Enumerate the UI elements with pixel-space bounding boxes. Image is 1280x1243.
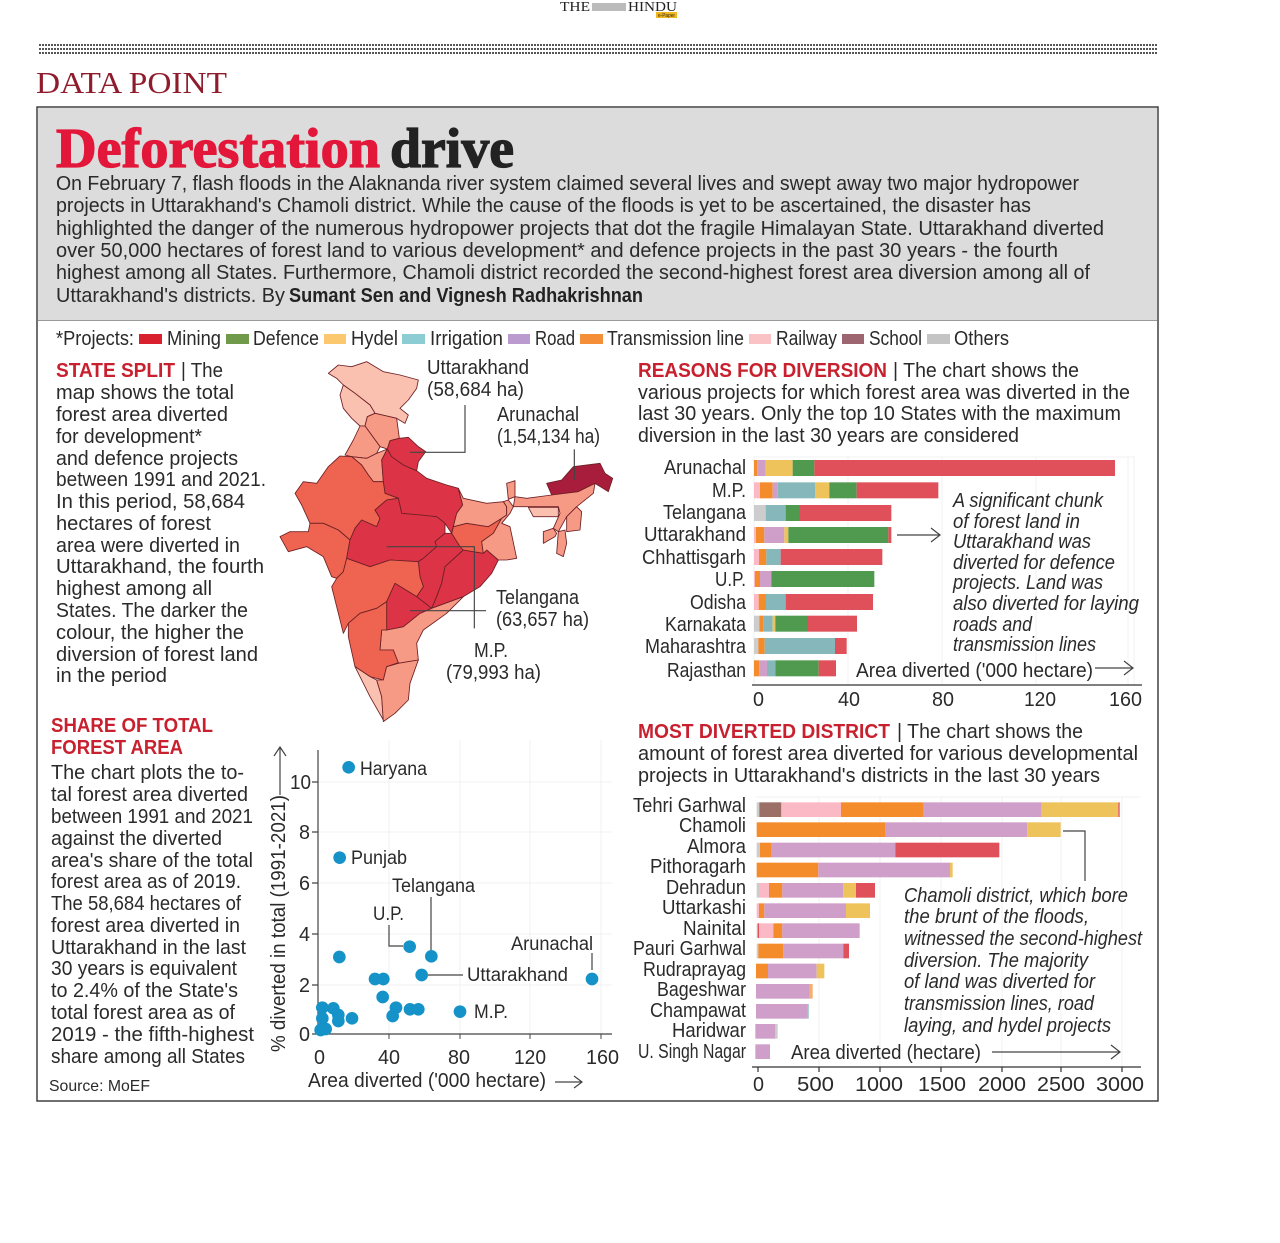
map labels: Uttarakhand: [427, 356, 529, 379]
annotation: Uttarakhand defence note: roads and: [953, 613, 1033, 636]
bar chart: reasons for diversion by state: Odisha: [690, 591, 747, 614]
intro text block: over 50,000 hectares of forest land to various development* and defence projects in the past 30 years - the fourth: [56, 239, 1058, 262]
bar chart: reasons for diversion by state: Rajasthan: [667, 659, 746, 682]
bar chart: reasons for diversion by state: U.P.: [715, 568, 746, 591]
text block: state split: for development*: [56, 425, 202, 448]
heading: reasons for diversion: [638, 359, 1130, 447]
legend: project types: Defence: [253, 327, 319, 350]
bar chart: forest diversion by Uttarakhand district: Tehri Garhwal: [633, 794, 746, 817]
legend: project types: *Projects:: [56, 327, 134, 350]
map: India forest diversion choropleth: [280, 362, 613, 722]
intro text block: [56, 172, 1104, 307]
annotation: Uttarakhand defence note: of forest land in: [953, 510, 1080, 533]
title: Deforestation: [56, 118, 380, 180]
bar chart: reasons for diversion by state: Maharashtra: [645, 635, 747, 658]
annotation: Chamoli note: Chamoli district, which bore: [904, 884, 1128, 907]
annotation: Chamoli note: witnessed the second-highest: [904, 927, 1143, 950]
heading: reasons for diversion: | The chart shows the: [893, 359, 1079, 382]
text block: share of total forest area: between 1991 and 2021: [51, 805, 253, 828]
annotation: Uttarakhand defence note: Uttarakhand was: [953, 530, 1091, 553]
text block: share of total forest area: against the diverted: [51, 827, 222, 850]
map labels: (1,54,134 ha): [497, 425, 600, 448]
panel: infographic frame: [37, 107, 1158, 1101]
scatter chart: area diverted vs share: 80: [448, 1046, 470, 1069]
text block: state split: | The: [181, 359, 223, 382]
title: drive: [390, 118, 514, 180]
text block: state split: [56, 359, 266, 687]
text block: share of total forest area: share among all States: [51, 1045, 245, 1068]
panel: header background: [38, 108, 1157, 320]
text block: state split: between 1991 and 2021.: [56, 468, 266, 491]
annotation: Uttarakhand defence note: also diverted for laying: [953, 592, 1140, 615]
bar chart: forest diversion by Uttarakhand district: [633, 794, 1144, 1096]
bar chart: reasons for diversion by state: Telangana: [663, 501, 747, 524]
bar chart: forest diversion by Uttarakhand district: Uttarkashi: [662, 896, 746, 919]
bar chart: forest diversion by Uttarakhand district: Area diverted (hectare): [791, 1041, 981, 1064]
legend: project types: [56, 327, 1009, 350]
bar chart: forest diversion by Uttarakhand district: Chamoli: [679, 814, 746, 837]
text block: share of total forest area: [51, 714, 254, 1068]
heading: reasons for diversion: various projects for which forest area was diverted in the: [638, 381, 1130, 404]
legend: project types: Hydel: [351, 327, 398, 350]
scatter chart: area diverted vs share: M.P.: [474, 1002, 508, 1023]
scatter chart: area diverted vs share: Uttarakhand: [467, 965, 568, 986]
scatter chart: area diverted vs share: 6: [299, 872, 310, 895]
bar chart: reasons for diversion by state: Arunachal: [664, 456, 746, 479]
text block: state split: map shows the total: [56, 381, 234, 404]
legend: project types: Transmission line: [607, 327, 744, 350]
bar chart: forest diversion by Uttarakhand district: 0: [753, 1073, 764, 1096]
text block: share of total forest area: area's share of the total: [51, 849, 253, 872]
heading: most diverted district: projects in Uttarakhand's districts in the last 30 years: [638, 764, 1100, 787]
legend: project types: Mining: [167, 327, 221, 350]
scatter chart: area diverted vs share: 0: [314, 1046, 325, 1069]
scatter chart: area diverted vs share: 4: [299, 923, 310, 946]
text block: state split: STATE SPLIT: [56, 359, 175, 382]
text block: state split: States. The darker the: [56, 599, 248, 622]
logo: The Hindu: [560, 0, 677, 19]
text block: state split: and defence projects: [56, 447, 238, 470]
scatter chart: area diverted vs share: % diverted in total (1991-2021): [267, 795, 290, 1052]
bar chart: forest diversion by Uttarakhand district: 500: [797, 1073, 834, 1096]
heading: most diverted district: [638, 720, 1138, 787]
scatter chart: area diverted vs share: 120: [514, 1046, 546, 1069]
bar chart: reasons for diversion by state: Uttarakhand: [644, 523, 746, 546]
annotation: Chamoli note: transmission lines, road: [904, 992, 1095, 1015]
scatter chart: area diverted vs share: Haryana: [360, 759, 427, 780]
bar chart: forest diversion by Uttarakhand district: U. Singh Nagar: [638, 1040, 746, 1063]
logo: The Hindu: e-Paper: [658, 13, 675, 19]
map labels: (79,993 ha): [446, 661, 541, 684]
bar chart: reasons for diversion by state: 80: [932, 688, 954, 711]
bar chart: forest diversion by Uttarakhand district: 2000: [978, 1073, 1026, 1096]
bar chart: forest diversion by Uttarakhand district: 2500: [1037, 1073, 1085, 1096]
bar chart: forest diversion by Uttarakhand district: Pithoragarh: [650, 855, 746, 878]
bar chart: forest diversion by Uttarakhand district: Dehradun: [666, 876, 746, 899]
annotation: Chamoli note: [904, 884, 1143, 1037]
text block: share of total forest area: to 2.4% of the State's: [51, 979, 238, 1002]
scatter chart: area diverted vs share: Arunachal: [511, 934, 593, 955]
map labels: Arunachal: [497, 403, 579, 426]
scatter chart: area diverted vs share: 160: [586, 1046, 619, 1069]
bar chart: forest diversion by Uttarakhand district: 3000: [1096, 1073, 1144, 1096]
text block: share of total forest area: total forest area as of: [51, 1001, 235, 1024]
bar chart: reasons for diversion by state: Karnakata: [665, 613, 747, 636]
map labels: (63,657 ha): [496, 608, 589, 631]
legend: project types: Railway: [776, 327, 838, 350]
heading: reasons for diversion: diversion in the last 30 years are considered: [638, 424, 1019, 447]
legend: project types: Road: [535, 327, 575, 350]
text block: share of total forest area: The 58,684 hectares of: [51, 892, 241, 915]
text block: share of total forest area: tal forest area diverted: [51, 783, 248, 806]
bar chart: reasons for diversion by state: Chhattisgarh: [642, 546, 746, 569]
annotation: Chamoli note: diversion. The majority: [904, 949, 1090, 972]
arrow: Uttarakhand bar to note: [897, 528, 940, 542]
source: Source: MoEF: [49, 1078, 150, 1095]
legend: project types: Others: [954, 327, 1009, 350]
text block: state split: highest among all: [56, 577, 212, 600]
text block: share of total forest area: Uttarakhand in the last: [51, 936, 246, 959]
bar chart: reasons for diversion by state: 160: [1109, 688, 1142, 711]
scatter chart: area diverted vs share: Punjab: [351, 848, 407, 869]
section label: Data Point: DATA POINT: [36, 65, 227, 100]
scatter chart: area diverted vs share: 8: [299, 821, 310, 844]
map leader lines: [387, 405, 574, 628]
bar chart: forest diversion by Uttarakhand district: Champawat: [650, 999, 746, 1022]
text block: state split: in the period: [56, 664, 167, 687]
map labels: M.P.: [474, 639, 508, 662]
text block: state split: diversion of forest land: [56, 643, 258, 666]
map labels: Telangana: [496, 586, 580, 609]
bar chart: forest diversion by Uttarakhand district: 1000: [855, 1073, 903, 1096]
text block: state split: Uttarakhand, the fourth: [56, 555, 264, 578]
annotation: Uttarakhand defence note: A significant chunk: [951, 489, 1105, 512]
text block: share of total forest area: SHARE OF TOTAL: [51, 714, 213, 737]
heading: most diverted district: MOST DIVERTED DISTRICT: [638, 720, 890, 743]
bar chart: forest diversion by Uttarakhand district: Pauri Garhwal: [633, 937, 746, 960]
text block: share of total forest area: 30 years is equivalent: [51, 957, 237, 980]
bar chart: forest diversion by Uttarakhand district: Haridwar: [672, 1019, 746, 1042]
text block: share of total forest area: FOREST AREA: [51, 736, 183, 759]
annotation: Uttarakhand defence note: [951, 489, 1140, 656]
text block: state split: forest area diverted: [56, 403, 228, 426]
scatter chart: area diverted vs share: [267, 740, 619, 1092]
scatter chart: area diverted vs share: 10: [290, 771, 311, 794]
scatter chart: area diverted vs share: Area diverted ('000 hectare): [308, 1069, 546, 1092]
scatter chart: area diverted vs share: Telangana: [392, 876, 475, 897]
bar chart: forest diversion by Uttarakhand district: Rudraprayag: [643, 958, 746, 981]
text block: share of total forest area: The chart plots the to-: [51, 761, 244, 784]
heading: most diverted district: | The chart shows the: [897, 720, 1083, 743]
legend: project types: Irrigation: [430, 327, 503, 350]
annotation: Chamoli note: the brunt of the floods,: [904, 905, 1089, 928]
map labels: [427, 356, 600, 684]
bar chart: forest diversion by Uttarakhand district: 1500: [918, 1073, 966, 1096]
bar chart: reasons for diversion by state: Area diverted ('000 hectare): [856, 659, 1093, 682]
bar chart: forest diversion by Uttarakhand district: Bageshwar: [657, 978, 746, 1001]
annotation: Uttarakhand defence note: transmission lines: [953, 633, 1096, 656]
bar chart: reasons for diversion by state: 40: [838, 688, 860, 711]
annotation: Chamoli note: laying, and hydel projects: [904, 1014, 1111, 1037]
heading: reasons for diversion: REASONS FOR DIVERSION: [638, 359, 887, 382]
heading: reasons for diversion: last 30 years. Only the top 10 States with the maximum: [638, 402, 1121, 425]
bar chart: forest diversion by Uttarakhand district: Nainital: [683, 917, 746, 940]
intro text block: On February 7, flash floods in the Alaknanda river system claimed several lives and swept away two major hydropower: [56, 172, 1079, 195]
bar chart: reasons for diversion by state: [642, 456, 1142, 711]
text block: share of total forest area: forest area as of 2019.: [51, 870, 241, 893]
intro text block: Sumant Sen and Vignesh Radhakrishnan: [289, 284, 643, 307]
logo: The Hindu: THE: [560, 0, 590, 15]
scatter chart: area diverted vs share: U.P.: [373, 904, 404, 925]
annotation: Chamoli note: of land was diverted for: [904, 970, 1096, 993]
annotation: Uttarakhand defence note: projects. Land was: [952, 571, 1103, 594]
text block: state split: In this period, 58,684: [56, 490, 245, 513]
bar chart: reasons for diversion by state: 0: [753, 688, 764, 711]
text block: share of total forest area: 2019 - the fifth-highest: [51, 1023, 254, 1046]
legend: project types: School: [869, 327, 922, 350]
bar chart: reasons for diversion by state: 120: [1024, 688, 1056, 711]
bar chart: forest diversion by Uttarakhand district: Almora: [687, 835, 747, 858]
text block: share of total forest area: forest area diverted in: [51, 914, 240, 937]
text block: state split: hectares of forest: [56, 512, 211, 535]
map labels: (58,684 ha): [427, 378, 524, 401]
leader line: Chamoli note: [1063, 831, 1085, 881]
intro text block: Uttarakhand's districts. By: [56, 284, 286, 307]
scatter chart: area diverted vs share: 0: [299, 1023, 310, 1046]
scatter chart: area diverted vs share: 2: [299, 974, 310, 997]
annotation: Uttarakhand defence note: diverted for defence: [953, 551, 1115, 574]
text block: state split: area were diverted in: [56, 534, 240, 557]
intro text block: projects in Uttarakhand's Chamoli district. While the cause of the floods is yet to be ascertained, the disaster has: [56, 194, 1031, 217]
text block: state split: colour, the higher the: [56, 621, 244, 644]
logo: The Hindu: HINDU: [628, 0, 677, 15]
bar chart: reasons for diversion by state: M.P.: [712, 479, 746, 502]
intro text block: highest among all States. Furthermore, Chamoli district recorded the second-highest forest area diversion among all of: [56, 261, 1090, 284]
scatter chart: area diverted vs share: 40: [378, 1046, 400, 1069]
heading: most diverted district: amount of forest area diverted for various developmental: [638, 742, 1138, 765]
intro text block: highlighted the danger of the numerous hydropower projects that dot the fragile Himalayan State. Uttarakhand diverted: [56, 217, 1104, 240]
